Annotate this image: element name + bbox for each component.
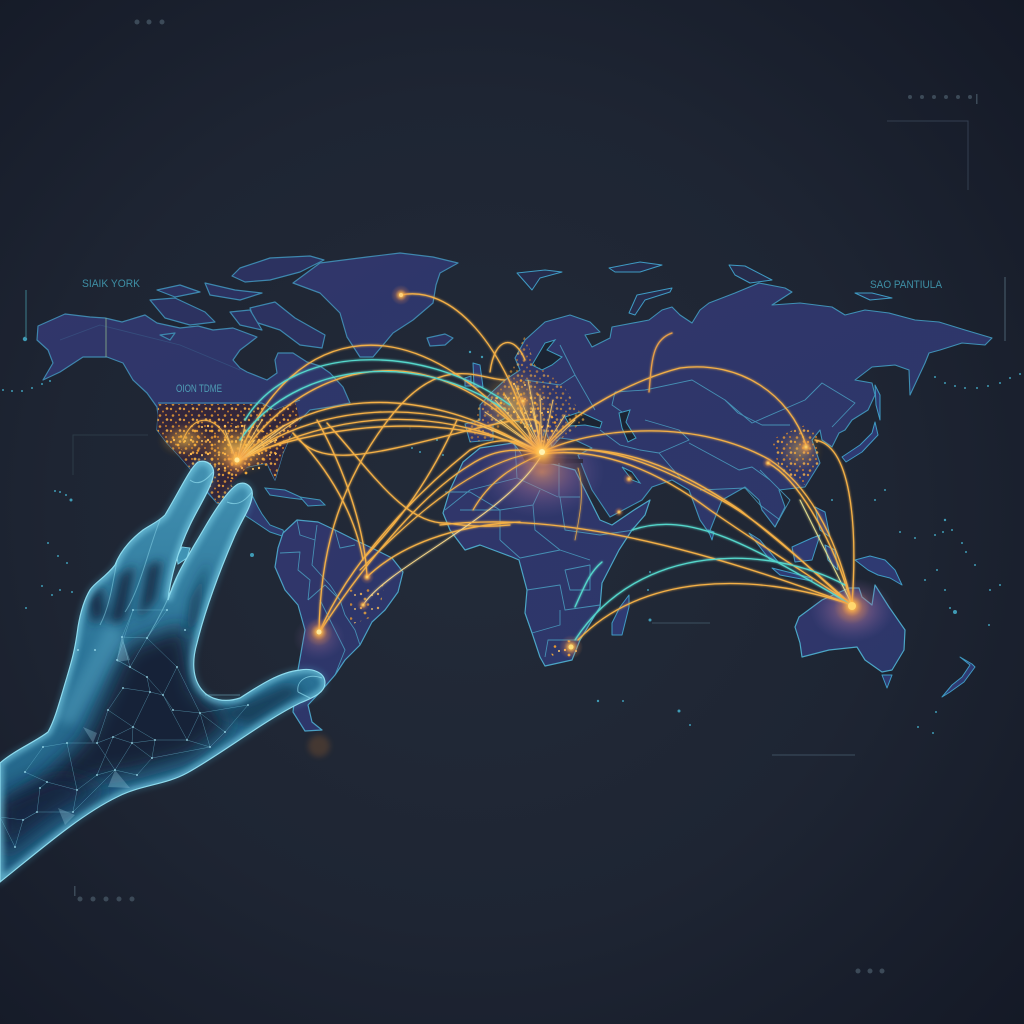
world map — [2, 253, 1021, 734]
city lights: Europe overlay — [490, 378, 558, 445]
hand: palm dark core — [0, 625, 235, 842]
callout line left — [25, 290, 27, 338]
hand: finger shadows — [88, 560, 208, 640]
arcs: teal routes — [240, 360, 852, 640]
hotspot: Argentina glow — [293, 616, 345, 660]
Arctic islands — [150, 256, 453, 348]
node: Europe hub — [516, 426, 568, 478]
node: Greenland — [391, 285, 411, 305]
continent: North America — [37, 314, 350, 507]
Australia — [795, 585, 905, 672]
arcs: amber routes — [183, 294, 854, 640]
node: Middle East — [614, 473, 635, 517]
node: South Africa — [559, 635, 583, 659]
hand: small finger tip — [177, 547, 190, 564]
hand: thumb shade — [215, 685, 305, 725]
city lights: South Africa — [550, 640, 580, 660]
inland seas — [520, 340, 640, 483]
hand: outline — [0, 461, 325, 882]
hand — [0, 450, 340, 890]
city lights: United States base — [157, 402, 300, 505]
hand: mesh lines — [0, 610, 248, 847]
hand: mesh facets — [58, 637, 130, 825]
network nodes — [221, 285, 870, 757]
city lights: Europe — [468, 335, 585, 445]
node: Europe city — [516, 394, 530, 408]
city lights: United States — [157, 402, 300, 505]
node: Argentina — [305, 618, 333, 646]
label: Siaik York: SIAIK YORK — [82, 278, 141, 290]
label: Sao Pantiula: SAO PANTIULA — [870, 279, 943, 291]
hand: lighter wrist streak — [55, 620, 125, 725]
hand: edge light — [0, 461, 325, 882]
connection arcs — [183, 294, 854, 640]
arcs: hub fan United States — [225, 418, 300, 462]
callout line right — [1004, 277, 1006, 341]
country borders — [60, 318, 855, 675]
Islands: Asia-Pacific — [465, 262, 975, 697]
continent: South America — [275, 520, 403, 731]
hotspot: Australia glow — [810, 578, 894, 642]
arcs: hub fan Europe — [480, 380, 575, 452]
hotspot: north Africa glow — [480, 426, 604, 518]
continent: Eurasia — [465, 283, 992, 533]
node: China — [762, 438, 815, 469]
label: Oion Tdme: OION TDME — [176, 383, 222, 395]
city lights: Brazil — [350, 585, 385, 625]
continent: Central America and Caribbean — [235, 488, 325, 537]
faint flare — [308, 735, 330, 757]
glow: city light clusters — [159, 369, 822, 474]
hand: arm dark band — [0, 775, 110, 860]
city lights: China — [770, 425, 820, 485]
node: United States — [221, 444, 253, 476]
hand: outer glow — [0, 461, 325, 882]
node: Australia hub — [834, 588, 870, 624]
hand: finger creases and nails — [100, 472, 322, 698]
scattered island dots — [2, 337, 1021, 734]
continent: Africa — [443, 443, 650, 666]
hand: body fill — [0, 450, 340, 890]
hand: mesh nodes — [14, 609, 249, 848]
city lights: United States overlay — [170, 420, 285, 480]
continent: Greenland — [293, 253, 458, 357]
node: Brazil — [357, 570, 374, 611]
